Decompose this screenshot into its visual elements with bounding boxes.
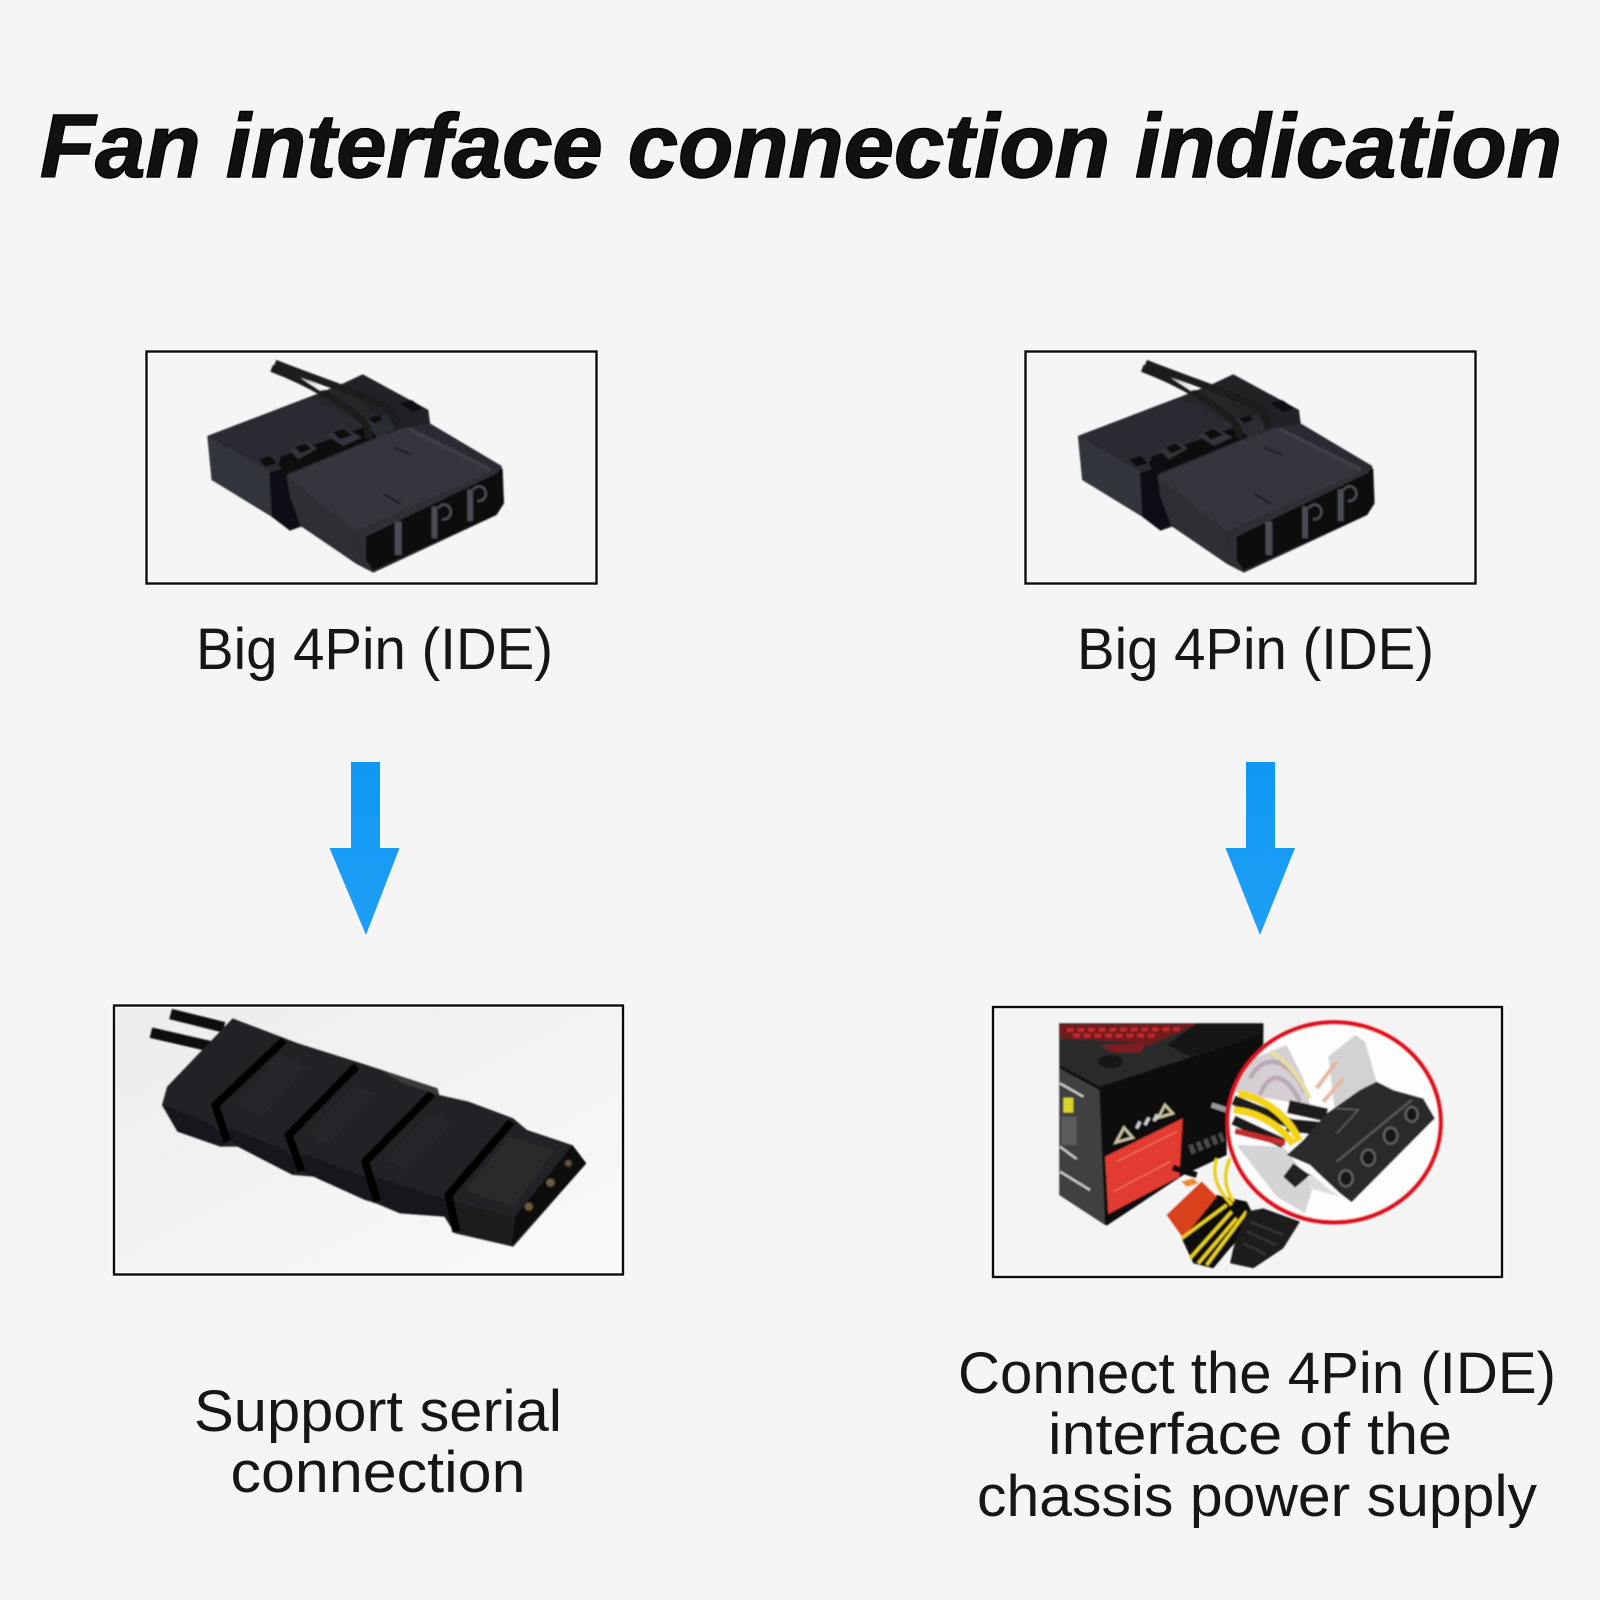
icon: 4pin connector photo right	[1078, 363, 1375, 573]
icon: chained molex connector	[151, 1014, 586, 1247]
panel: left big 4pin connector	[146, 352, 596, 584]
text: power supply caption	[958, 1341, 1556, 1529]
label: big 4pin left: Big 4Pin (IDE)	[196, 617, 553, 682]
icon: 4pin connector photo left	[207, 363, 504, 573]
panel: right big 4pin connector	[1026, 352, 1476, 584]
text: serial connection caption	[194, 1379, 562, 1505]
text: serial connection caption: connection	[230, 1440, 526, 1505]
text: power supply caption: Connect the 4Pin (IDE)	[958, 1341, 1556, 1406]
icon: red magnifier circle	[1227, 1022, 1441, 1222]
panel: serial connection photo	[114, 1006, 623, 1274]
arrow: right down	[1226, 762, 1295, 935]
text: serial connection caption: Support serial	[194, 1379, 562, 1444]
arrow: left down	[330, 762, 400, 935]
text: power supply caption: interface of the	[1048, 1402, 1452, 1467]
text: power supply caption: chassis power supply	[977, 1464, 1537, 1529]
icon: power supply unit	[1059, 1023, 1300, 1268]
label: big 4pin right: Big 4Pin (IDE)	[1077, 617, 1434, 682]
panel: power supply photo	[993, 1007, 1502, 1277]
title: Fan interface connection indication	[40, 97, 1562, 197]
